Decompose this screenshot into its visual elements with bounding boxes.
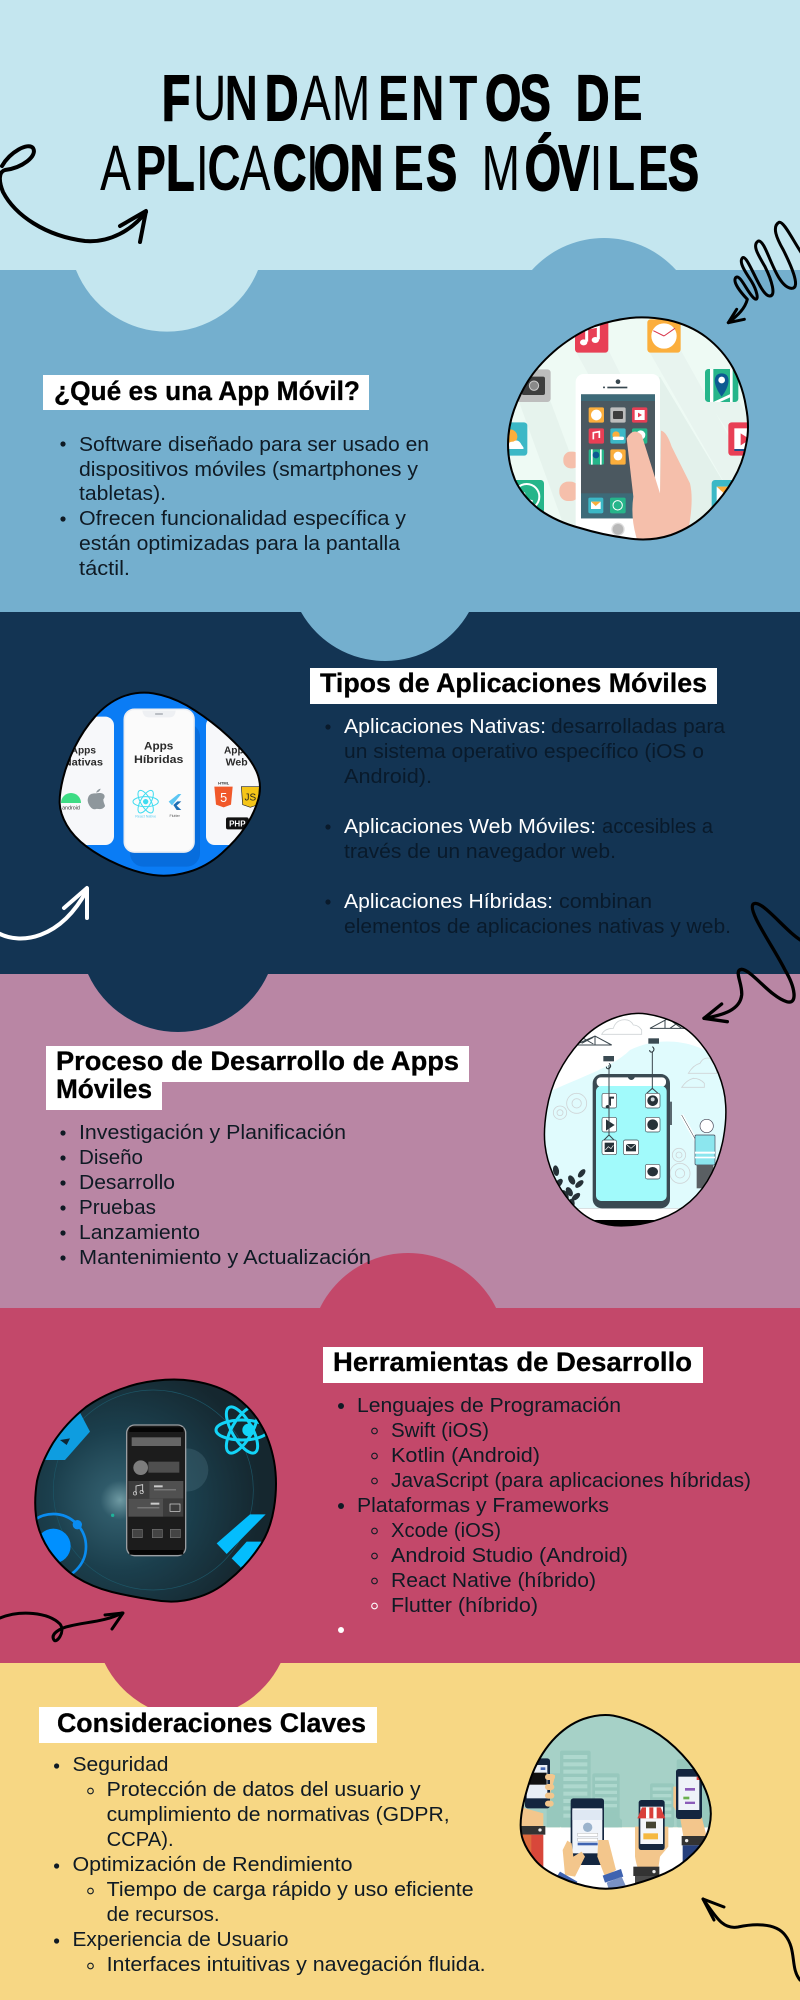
panel: que es una app movil — [43, 310, 777, 580]
title: E — [638, 133, 669, 204]
title: E — [612, 63, 643, 134]
text block: tipos list: desarrolladas para — [551, 716, 726, 738]
illustration: three phones native hybrid web: JS — [245, 793, 256, 804]
text block: definicion: Ofrecen funcionalidad específica y — [79, 508, 406, 530]
text block: tipos list — [325, 716, 731, 938]
text block: consideraciones list: de recursos. — [107, 1904, 220, 1926]
heading: proceso: Móviles — [56, 1074, 152, 1104]
title: L — [607, 133, 635, 204]
arrow: zigzag right — [704, 903, 800, 1022]
title: N — [225, 63, 258, 134]
title: S — [668, 133, 699, 204]
illustration: three phones native hybrid web: Nativas — [64, 757, 103, 768]
title: S — [520, 63, 551, 134]
illustration: three phones native hybrid web: 5 — [220, 791, 227, 805]
heading: que es una app: ¿Qué es una App Móvil? — [54, 376, 360, 406]
illustration: three phones native hybrid web: Flutter — [169, 814, 181, 818]
title: A — [300, 63, 332, 134]
text block: consideraciones list: Optimización de Rendimiento — [72, 1854, 352, 1876]
heading: proceso — [46, 1046, 469, 1110]
title: T — [449, 63, 477, 134]
title: A — [100, 133, 131, 204]
panel: tipos de aplicaciones — [20, 668, 731, 938]
illustration: three phones native hybrid web: Apps — [71, 746, 96, 757]
text block: herramientas list: Kotlin (Android) — [391, 1445, 540, 1467]
illustration: three phones native hybrid web: Apps — [144, 741, 173, 753]
text block: herramientas list: Flutter (híbrido) — [391, 1595, 538, 1617]
text block: tipos list: Aplicaciones Web Móviles: — [344, 816, 596, 838]
text block: herramientas list: React Native (híbrido) — [391, 1570, 596, 1592]
title: U — [193, 63, 226, 134]
text block: pasos: Lanzamiento — [79, 1222, 200, 1244]
text block: tipos list: accesibles a — [602, 816, 714, 838]
arrow: white curve — [0, 888, 87, 938]
illustration: three phones native hybrid web: Híbridas — [134, 754, 183, 766]
heading: herramientas: Herramientas de Desarrollo — [333, 1347, 692, 1377]
text block: tipos list: Aplicaciones Híbridas: — [344, 891, 553, 913]
text block: definicion: dispositivos móviles (smartphones y — [79, 459, 418, 481]
illustration: crane assembling phone — [544, 1012, 727, 1227]
text block: definicion: están optimizadas para la pantalla — [79, 533, 401, 555]
arrow: squiggle bottom right — [703, 1899, 800, 1980]
text block: consideraciones list: Seguridad — [72, 1754, 168, 1776]
text block: pasos: Investigación y Planificación — [79, 1122, 346, 1144]
title: V — [559, 133, 589, 204]
title: A — [240, 133, 271, 204]
text block: herramientas list: Xcode (iOS) — [391, 1520, 501, 1542]
title: F — [162, 63, 190, 134]
illustration: hand holding phone with app icons — [507, 316, 749, 540]
text block: tipos list: Android). — [344, 766, 432, 788]
text block: tipos list: elementos de aplicaciones nativas y web. — [344, 916, 731, 938]
heading: tipos: Tipos de Aplicaciones Móviles — [320, 668, 707, 698]
text block: consideraciones list: Protección de datos del usuario y — [107, 1779, 421, 1801]
text block: consideraciones list: Experiencia de Usuario — [72, 1929, 288, 1951]
text block: definicion — [60, 434, 429, 580]
illustration: three phones native hybrid web: HTML — [218, 780, 230, 785]
arrow: spring top right — [728, 222, 800, 323]
panel: consideraciones claves — [39, 1700, 730, 1976]
illustration: three phones native hybrid web: android — [62, 805, 80, 811]
illustration: three phones native hybrid web — [58, 692, 261, 877]
title: S — [426, 133, 457, 204]
panel: herramientas de desarrollo — [20, 1347, 751, 1633]
illustration: three phones native hybrid web: PHP — [229, 819, 246, 828]
heading: consideraciones: Consideraciones Claves — [57, 1708, 366, 1738]
text block: herramientas list — [338, 1395, 751, 1633]
text block: consideraciones list: CCPA). — [107, 1829, 174, 1851]
title: C — [273, 133, 306, 204]
text block: consideraciones list: Tiempo de carga rápido y uso eficiente — [107, 1879, 474, 1901]
illustration: three phones native hybrid web: React Native — [135, 814, 156, 818]
illustration: hands holding phones in city — [520, 1714, 712, 1890]
title: C — [207, 133, 241, 204]
title: M — [332, 63, 370, 134]
text block: pasos: Pruebas — [79, 1197, 156, 1219]
text block: consideraciones list: Interfaces intuitivas y navegación fluida. — [107, 1954, 486, 1976]
title: M — [482, 133, 520, 204]
text block: herramientas list: Android Studio (Android) — [391, 1545, 628, 1567]
arrow: curl top left — [0, 146, 146, 242]
title: E — [393, 133, 424, 204]
title: I — [196, 133, 209, 204]
text block: consideraciones list — [54, 1754, 486, 1976]
title: P — [135, 133, 166, 204]
illustration: phone with framework logos — [34, 1378, 277, 1603]
title: N — [350, 133, 383, 204]
text block: herramientas list: JavaScript (para aplicaciones híbridas) — [391, 1470, 751, 1492]
text block: definicion: Software diseñado para ser usado en — [79, 434, 429, 456]
title: E — [378, 63, 409, 134]
scallop shapes between sections — [76, 270, 469, 1718]
title: N — [411, 63, 444, 134]
title: I — [590, 133, 602, 204]
text block: pasos: Diseño — [79, 1147, 143, 1169]
text block: tipos list: través de un navegador web. — [344, 841, 616, 863]
title — [100, 63, 699, 204]
panel: proceso de desarrollo — [46, 1000, 750, 1269]
text block: tipos list: Aplicaciones Nativas: — [344, 716, 546, 738]
illustration: three phones native hybrid web: Apps — [224, 746, 250, 757]
title: I — [306, 133, 319, 204]
text block: pasos: Mantenimiento y Actualización — [79, 1247, 371, 1269]
text block: herramientas list: Plataformas y Frameworks — [357, 1495, 609, 1517]
title: O — [314, 133, 350, 204]
title: D — [265, 63, 298, 134]
text block: definicion: tabletas). — [79, 483, 166, 505]
text block: tipos list: combinan — [559, 891, 652, 913]
text block: pasos: Desarrollo — [79, 1172, 175, 1194]
text block: herramientas list: Lenguajes de Programación — [357, 1395, 621, 1417]
title: L — [166, 133, 194, 204]
illustration: three phones native hybrid web: Web — [226, 757, 248, 768]
title: Ó — [525, 133, 561, 204]
text block: definicion: táctil. — [79, 558, 130, 580]
text block: herramientas list: Swift (iOS) — [391, 1420, 489, 1442]
arrow: looped curve lower left — [0, 1613, 123, 1641]
title: D — [576, 63, 609, 134]
text block: tipos list: un sistema operativo específico (iOS o — [344, 741, 704, 763]
title: O — [485, 63, 521, 134]
text block: pasos — [60, 1122, 371, 1269]
heading: proceso: Proceso de Desarrollo de Apps — [56, 1046, 459, 1076]
text block: consideraciones list: cumplimiento de normativas (GDPR, — [107, 1804, 450, 1826]
